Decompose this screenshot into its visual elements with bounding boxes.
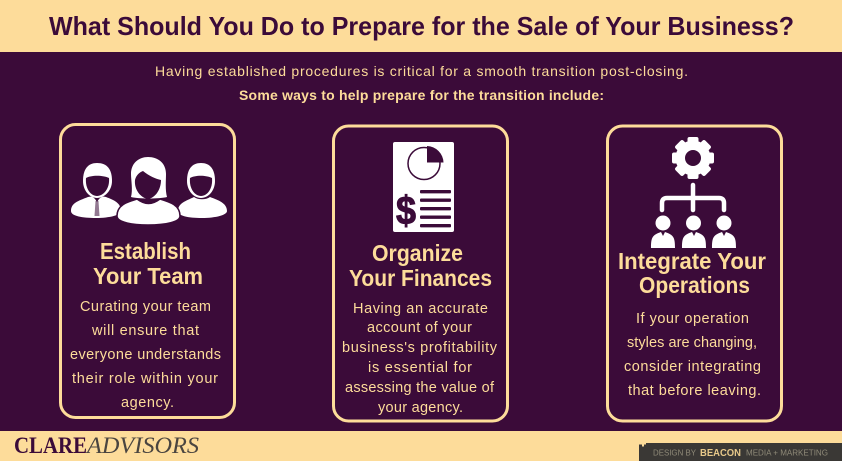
logo: Clare Advisors: ADVISORS <box>85 433 200 458</box>
body text <box>624 311 761 399</box>
badge: design credit: DESIGN BY <box>653 448 697 458</box>
icon: three people <box>71 157 227 225</box>
body text: is essential for <box>368 360 472 376</box>
body text: consider integrating <box>624 359 761 375</box>
badge: design credit <box>639 441 842 461</box>
body text: will ensure that <box>91 323 199 339</box>
icon: financial document <box>393 142 454 233</box>
body text: agency. <box>121 395 174 411</box>
heading: Operations <box>639 272 750 298</box>
body text <box>70 299 221 411</box>
body text: their role within your <box>72 371 218 387</box>
intro text <box>155 63 688 103</box>
footer band <box>0 431 842 461</box>
body text: Having an accurate <box>353 301 488 317</box>
body text: business's profitability <box>342 340 498 356</box>
heading: Organize <box>372 240 463 266</box>
heading <box>618 248 766 298</box>
icon: financial document: $ <box>396 189 416 233</box>
body text: Curating your team <box>80 299 211 315</box>
body text: everyone understands <box>70 347 221 363</box>
body text: If your operation <box>636 311 749 327</box>
logo: Clare Advisors: CLARE <box>14 433 87 458</box>
heading: Establish <box>100 238 191 264</box>
title: What Should You Do to Prepare for the Sale of Your Business? <box>49 11 794 41</box>
header band <box>0 0 842 52</box>
badge: design credit: MEDIA + MARKETING <box>746 448 828 458</box>
body text: that before leaving. <box>628 383 761 399</box>
heading: Integrate Your <box>618 248 766 274</box>
heading <box>93 238 203 289</box>
intro text: Having established procedures is critical for a smooth transition post-closing. <box>155 63 688 79</box>
body text <box>342 301 498 416</box>
body text: styles are changing, <box>627 335 757 351</box>
badge: design credit: BEACON <box>700 448 741 459</box>
body text: your agency. <box>378 400 463 416</box>
heading: Your Team <box>93 263 203 289</box>
heading <box>349 240 492 291</box>
heading: Your Finances <box>349 265 492 291</box>
panel: establish your team <box>60 124 234 418</box>
body text: account of your <box>367 320 472 336</box>
panel: integrate your operations <box>608 126 782 421</box>
intro text: Some ways to help prepare for the transition include: <box>239 87 604 103</box>
body text: assessing the value of <box>345 380 495 396</box>
logo: Clare Advisors <box>14 433 200 458</box>
panel: organize your finances <box>334 126 508 421</box>
icon: gear and org chart <box>651 137 736 248</box>
